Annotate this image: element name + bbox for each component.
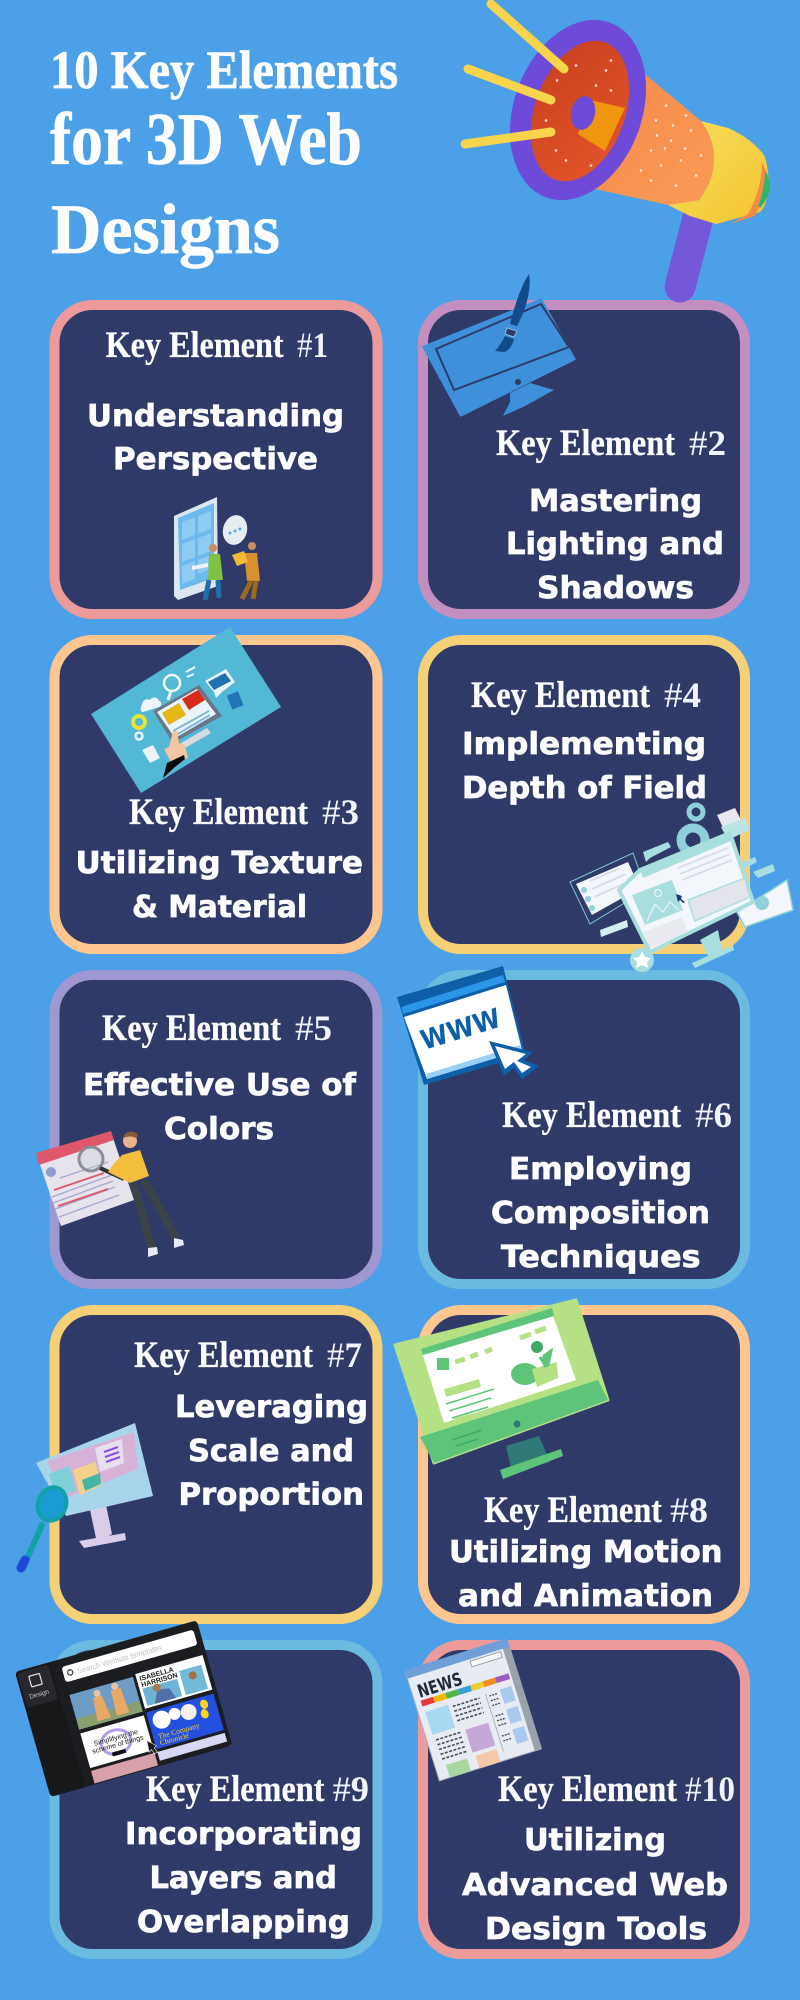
- heading: leveraging scale and proportion: [175, 1390, 368, 1512]
- panel: key element 2: [423, 274, 745, 614]
- panel: key element 7: [21, 1310, 378, 1619]
- label: key element 6: #6: [695, 1095, 732, 1135]
- heading: utilizing advanced web design tools: Design Tools: [485, 1912, 707, 1947]
- title: 10 Key Elements: [50, 40, 398, 100]
- heading: utilizing advanced web design tools: Advanced Web: [462, 1868, 728, 1903]
- icon: www browser window with cursor: [397, 966, 539, 1085]
- panel: key element 6: [397, 966, 745, 1284]
- icon: people with phone: [174, 497, 260, 600]
- heading: leveraging scale and proportion: Scale and: [188, 1434, 354, 1469]
- label: key element 8: Key Element: [484, 1490, 663, 1531]
- panel: key element 8: [395, 1300, 745, 1619]
- icon: dark design template panel: Design: [29, 1688, 50, 1701]
- icon: monitor with paintbrush: [424, 274, 574, 416]
- icon: news web page: NEWS: [415, 1669, 465, 1703]
- panel: key element 5: [36, 975, 378, 1284]
- icon: dark design template panel: [15, 1620, 232, 1797]
- icon: dark design template panel: HARRISON: [141, 1672, 179, 1689]
- label: key element 1: #1: [297, 325, 328, 365]
- heading: employing composition techniques: Employing: [509, 1152, 692, 1187]
- title: for 3D Web: [50, 99, 362, 181]
- heading: utilizing texture and material: Utilizing Texture: [76, 846, 363, 881]
- heading: utilizing motion and animation: Utilizing Motion: [449, 1535, 722, 1570]
- icon: megaphone: [465, 1, 770, 287]
- label: key element 3: Key Element: [129, 792, 309, 833]
- heading: implementing depth of field: Implementing: [462, 727, 706, 762]
- heading: incorporating layers and overlapping: Overlapping: [137, 1905, 350, 1940]
- label: key element 10: #10: [685, 1769, 735, 1809]
- title: [50, 40, 398, 269]
- label: key element 7: #7: [327, 1335, 362, 1375]
- heading: utilizing texture and material: [76, 846, 363, 925]
- heading: effective use of colors: Colors: [164, 1112, 274, 1147]
- heading: implementing depth of field: Depth of Field: [462, 771, 707, 806]
- label: key element 4: Key Element: [471, 675, 651, 716]
- heading: mastering lighting and shadows: [506, 484, 724, 606]
- label: key element 9: #9: [333, 1769, 369, 1809]
- label: key element 7: Key Element: [134, 1335, 314, 1376]
- panel: key element 1: [54, 305, 378, 614]
- icon: dark design template panel: ISABELLA: [139, 1667, 174, 1683]
- icon: dark design template panel: Simplifying the: [93, 1729, 139, 1748]
- heading: utilizing advanced web design tools: Utilizing: [524, 1823, 666, 1858]
- heading: incorporating layers and overlapping: Incorporating: [125, 1817, 362, 1852]
- label: key element 8: #8: [670, 1490, 708, 1530]
- panel: key element 9: [15, 1620, 378, 1954]
- heading: understanding perspective: Understanding: [87, 399, 344, 434]
- heading: mastering lighting and shadows: Shadows: [537, 571, 694, 606]
- heading: incorporating layers and overlapping: [125, 1817, 362, 1940]
- icon: dark design template panel: The Company: [157, 1721, 201, 1741]
- heading: understanding perspective: [87, 399, 344, 477]
- panel: key element 4: [423, 640, 793, 972]
- heading: employing composition techniques: Composition: [491, 1196, 710, 1231]
- icon: dark design template panel: Search Website templates: [76, 1643, 163, 1676]
- heading: effective use of colors: [83, 1068, 357, 1147]
- heading: mastering lighting and shadows: Lighting and: [506, 527, 724, 562]
- panel: key element 3: [54, 627, 378, 949]
- heading: employing composition techniques: [491, 1152, 710, 1275]
- heading: implementing depth of field: [462, 727, 707, 806]
- heading: incorporating layers and overlapping: Layers and: [150, 1861, 337, 1896]
- heading: leveraging scale and proportion: Leveraging: [175, 1390, 368, 1425]
- label: key element 1: Key Element: [106, 325, 284, 366]
- heading: utilizing advanced web design tools: [462, 1823, 728, 1947]
- icon: teal card with monitor and hand: [91, 627, 281, 793]
- icon: person with magnifier and web page: [36, 1131, 184, 1257]
- heading: effective use of colors: Effective Use of: [83, 1068, 357, 1103]
- label: key element 3: #3: [322, 792, 359, 832]
- label: key element 5: Key Element: [102, 1008, 282, 1049]
- label: key element 9: Key Element: [146, 1769, 325, 1810]
- heading: employing composition techniques: Techniques: [501, 1240, 700, 1275]
- heading: understanding perspective: Perspective: [113, 442, 318, 477]
- label: key element 2: #2: [689, 423, 726, 463]
- icon: web design windows on monitor: [570, 805, 793, 972]
- title: Designs: [51, 191, 280, 269]
- icon: monitor with magnifying glass: [21, 1423, 153, 1568]
- icon: dark design template panel: Chronicle: [159, 1730, 190, 1747]
- icon: green monitor with piggy bank: [395, 1300, 608, 1479]
- heading: utilizing motion and animation: and Animation: [458, 1579, 713, 1614]
- heading: mastering lighting and shadows: Mastering: [529, 484, 702, 519]
- label: key element 5: #5: [295, 1008, 332, 1048]
- label: key element 2: Key Element: [496, 423, 676, 464]
- label: key element 10: Key Element: [498, 1769, 678, 1810]
- heading: utilizing motion and animation: [449, 1535, 722, 1614]
- icon: news web page: [405, 1638, 541, 1781]
- icon: www browser window with cursor: WWW: [417, 1003, 504, 1057]
- icon: dark design template panel: scheme of things: [92, 1734, 145, 1756]
- label: key element 4: #4: [664, 675, 701, 715]
- panel: key element 10: [405, 1638, 745, 1954]
- label: key element 6: Key Element: [502, 1095, 682, 1136]
- heading: utilizing texture and material: & Material: [132, 890, 307, 925]
- heading: leveraging scale and proportion: Proportion: [178, 1478, 364, 1512]
